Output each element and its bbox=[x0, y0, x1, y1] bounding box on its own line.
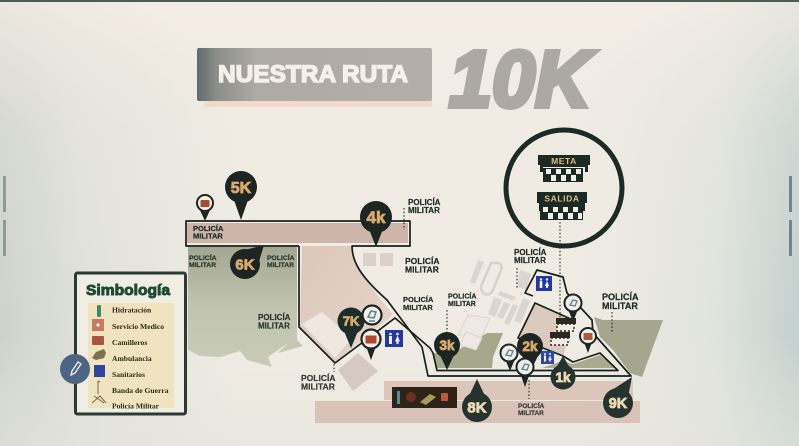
marker 4k bbox=[360, 201, 392, 247]
label south plaza: MILITAR bbox=[301, 382, 335, 392]
legend band: Banda de Guerra bbox=[112, 386, 169, 395]
label band: MILITAR bbox=[193, 232, 223, 240]
water pin south A bbox=[500, 344, 518, 371]
green zone south bbox=[434, 333, 503, 368]
legend medical: Servicio Medico bbox=[112, 322, 164, 331]
label green west: MILITAR bbox=[189, 262, 216, 269]
marker 7K: 7K bbox=[343, 314, 360, 328]
marker 4k: 4k bbox=[367, 208, 386, 227]
restroom north bbox=[536, 276, 552, 291]
salida sign: SALIDA bbox=[544, 194, 580, 204]
title banner bbox=[197, 48, 432, 107]
marker 9K: 9K bbox=[609, 396, 628, 412]
route markers bbox=[225, 171, 633, 422]
legend military police bbox=[92, 396, 160, 410]
marker 5K: 5K bbox=[231, 180, 252, 197]
plaza square south bbox=[338, 353, 378, 391]
buildings bbox=[458, 260, 531, 350]
green zone east bbox=[594, 317, 663, 377]
mini meta bbox=[556, 318, 576, 331]
title text: NUESTRA RUTA bbox=[218, 61, 408, 88]
bottom road bands bbox=[315, 381, 640, 423]
marker 7K bbox=[338, 308, 364, 348]
label buildings: POLICÍA bbox=[448, 292, 476, 300]
marker 6K bbox=[230, 245, 264, 279]
label buildings: MILITAR bbox=[448, 301, 476, 308]
legend hydration bbox=[97, 305, 152, 317]
label green centre: POLICÍA bbox=[258, 313, 291, 322]
legend ambulance: Ambulancia bbox=[112, 354, 152, 363]
marker 3k bbox=[434, 332, 460, 370]
labels: policia militar bbox=[189, 198, 639, 417]
legend stretcher: Camilleros bbox=[112, 338, 147, 347]
legend band bbox=[98, 381, 169, 395]
label east: POLICÍA bbox=[602, 292, 639, 302]
water pin south B bbox=[516, 358, 534, 387]
legend stretcher bbox=[92, 336, 147, 347]
plaza white bbox=[302, 312, 352, 358]
restroom south bbox=[541, 351, 554, 364]
label squares: MILITAR bbox=[405, 264, 439, 274]
label green east: MILITAR bbox=[267, 262, 294, 269]
marker 1k: 1k bbox=[555, 370, 571, 385]
green strip east bbox=[542, 355, 615, 368]
mini legend strip bbox=[392, 387, 457, 408]
marker 6K: 6K bbox=[235, 256, 255, 274]
label north block: POLICÍA bbox=[514, 248, 547, 257]
legend restrooms bbox=[94, 365, 145, 379]
label north east: MILITAR bbox=[408, 206, 440, 215]
marker 2k bbox=[517, 333, 543, 372]
marker 2k: 2k bbox=[522, 339, 538, 354]
start and finish circle bbox=[506, 130, 622, 246]
label road: POLICÍA bbox=[403, 295, 434, 304]
label south plaza: POLICÍA bbox=[301, 373, 335, 383]
start finish block bbox=[518, 303, 573, 357]
small squares bbox=[363, 253, 393, 266]
legend medical bbox=[92, 319, 164, 331]
water pin east bbox=[564, 294, 582, 322]
meta sign: META bbox=[551, 156, 577, 166]
label road: MILITAR bbox=[403, 303, 433, 312]
label south band: MILITAR bbox=[518, 410, 544, 417]
pencil button bbox=[60, 354, 90, 384]
service pins bbox=[197, 195, 596, 387]
legend military police: Policía Militar bbox=[112, 402, 160, 410]
label north block: MILITAR bbox=[514, 256, 546, 265]
legend heading: Simbología bbox=[86, 283, 171, 299]
legend list background bbox=[88, 303, 174, 408]
legend panel bbox=[76, 273, 186, 414]
legend restrooms: Sanitarios bbox=[112, 370, 145, 379]
dotted guides bbox=[334, 208, 612, 399]
medical pin east bbox=[580, 328, 596, 353]
legend hydration: Hidratación bbox=[112, 306, 152, 314]
green zone west bbox=[188, 247, 303, 367]
mini start finish signs bbox=[550, 318, 576, 345]
label green east: POLICÍA bbox=[267, 253, 295, 262]
marker 8K bbox=[462, 379, 492, 422]
route band north bbox=[187, 223, 408, 243]
label band: POLICÍA bbox=[193, 224, 224, 233]
restroom west bbox=[385, 330, 403, 347]
label east: MILITAR bbox=[602, 301, 638, 311]
label green west: POLICÍA bbox=[189, 253, 217, 262]
label green centre: MILITAR bbox=[258, 322, 290, 330]
marker 8K: 8K bbox=[467, 400, 487, 416]
legend ambulance bbox=[92, 349, 152, 363]
distance heading 10K: 10K bbox=[449, 34, 596, 124]
marker 5K bbox=[225, 171, 257, 220]
label north east: POLICÍA bbox=[408, 198, 441, 207]
marker 1k bbox=[550, 356, 576, 390]
mini salida bbox=[550, 332, 570, 345]
medical pin 7K bbox=[362, 330, 380, 360]
label south band: POLICÍA bbox=[518, 401, 545, 410]
water pin 7K bbox=[362, 306, 382, 324]
route line bbox=[186, 221, 631, 376]
medical pin north bbox=[197, 195, 213, 221]
restroom icons bbox=[385, 276, 554, 364]
label squares: POLICÍA bbox=[405, 256, 439, 266]
map: terrain bbox=[187, 223, 663, 423]
pink zone centre bbox=[300, 246, 393, 362]
marker 3k: 3k bbox=[439, 338, 455, 353]
marker 9K bbox=[603, 377, 633, 418]
